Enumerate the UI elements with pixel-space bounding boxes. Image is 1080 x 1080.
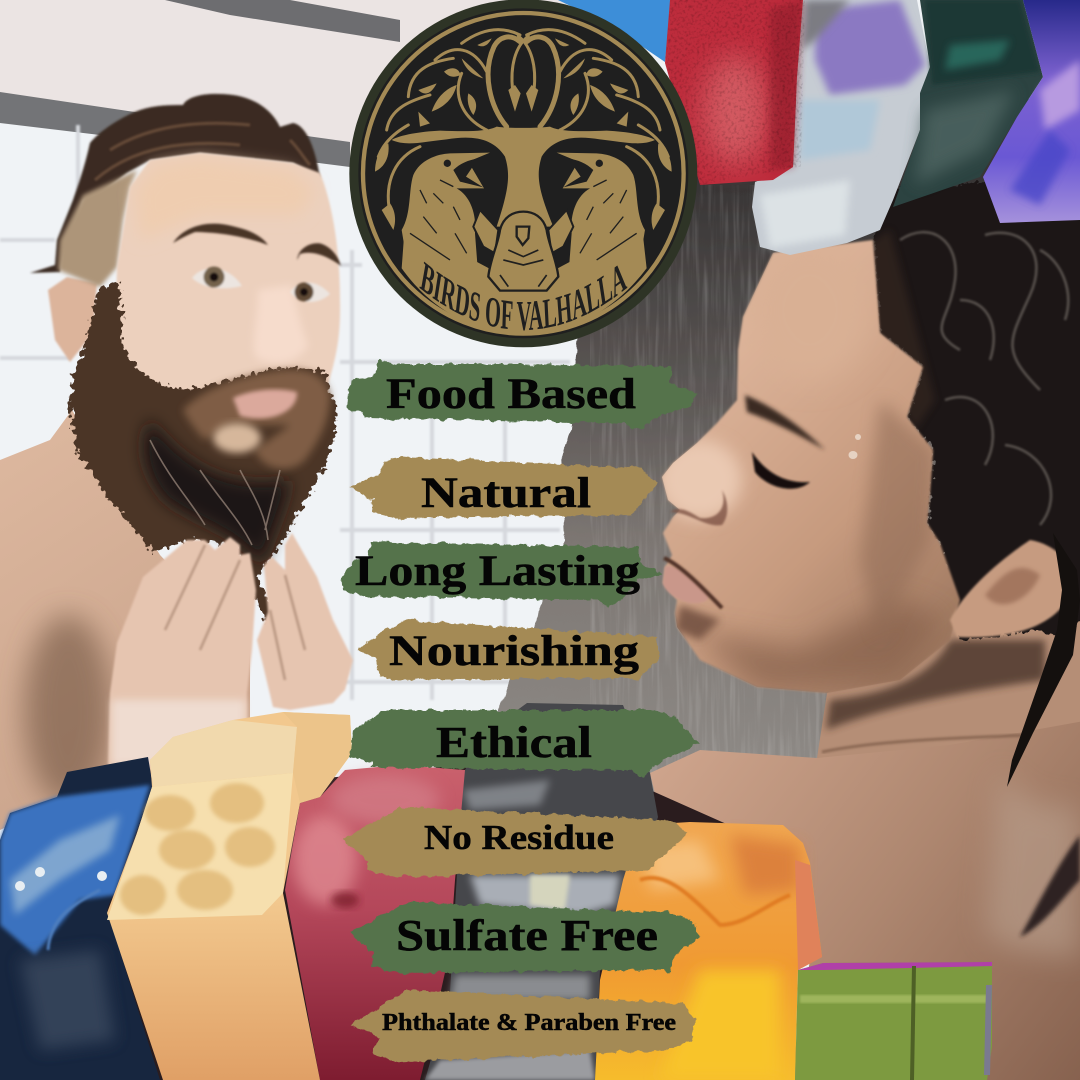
woman hairline wisps — [860, 230, 935, 430]
woman neck shadow — [826, 640, 1045, 730]
badge: Phthalate and Paraben Free — [350, 990, 695, 1062]
soap: blue — [558, 0, 672, 62]
logo branches — [378, 30, 668, 213]
woman inner ear — [985, 568, 1040, 604]
badge: Natural: Natural — [421, 470, 591, 517]
soap: dark green — [893, 0, 1043, 207]
soap: grey charcoal — [425, 703, 658, 1080]
man moustache — [183, 370, 330, 469]
logo wordmark: BIRDS OF VALHALLA — [420, 262, 628, 330]
man left eye — [192, 266, 242, 288]
soap: honeycomb — [107, 712, 352, 1080]
man ear — [48, 277, 97, 362]
badge: Sulfate Free: Sulfate Free — [396, 911, 658, 960]
logo right raven — [548, 153, 645, 277]
man right brow — [297, 243, 341, 266]
man left brow — [173, 224, 268, 245]
logo bottom banner — [402, 223, 647, 334]
woman back and shoulder — [650, 690, 1080, 1080]
logo outer rim — [349, 0, 697, 347]
badge: Sulfate Free — [350, 902, 700, 973]
woman eyebrow — [745, 395, 825, 450]
badge: Food Based: Food Based — [386, 371, 636, 418]
badge: No Residue: No Residue — [424, 818, 614, 857]
man chin patch — [213, 423, 261, 453]
logo left raven — [402, 153, 498, 277]
soap: galaxy blue — [0, 757, 160, 1080]
man left hand — [108, 537, 256, 770]
woman ear — [950, 540, 1073, 637]
woman lip line — [664, 558, 722, 608]
woman nose shadow — [670, 490, 727, 525]
soap: red — [665, 0, 805, 185]
man beard dark core — [144, 420, 290, 565]
logo: Birds of Valhalla badge — [349, 0, 698, 348]
man right eye — [290, 282, 330, 302]
badge: Ethical: Ethical — [436, 718, 592, 767]
soap: purple — [983, 0, 1080, 223]
badge: Nourishing — [358, 620, 658, 680]
soap bars: bottom — [0, 703, 992, 1080]
photo: woman showering — [650, 170, 1080, 1080]
man finger lines — [165, 545, 305, 680]
logo centre bird — [488, 212, 558, 291]
soap bars: top right — [558, 0, 1080, 255]
woman neck — [817, 620, 1080, 758]
man beard strands — [150, 440, 280, 545]
man nose and cheek — [254, 285, 308, 363]
badge: Long Lasting: Long Lasting — [355, 548, 641, 595]
woman eye closed — [752, 452, 810, 489]
badge: No Residue — [343, 807, 688, 877]
woman face — [662, 240, 960, 693]
man right hand — [257, 533, 353, 710]
badge: Phthalate and Paraben Free: Phthalate & Paraben Free — [382, 1010, 676, 1036]
man hair — [30, 94, 320, 273]
badge: Long Lasting — [342, 542, 662, 607]
logo tree — [392, 85, 655, 227]
logo leaves — [375, 38, 672, 230]
woman water drops — [848, 434, 861, 459]
soap stars — [15, 867, 107, 891]
man hand light — [112, 700, 245, 765]
woman back strand — [1020, 835, 1080, 937]
badge: Food Based — [347, 360, 697, 430]
badge: Natural — [350, 457, 658, 518]
man face — [115, 153, 340, 420]
background: grey shower with torn edge — [498, 100, 1080, 830]
soap: green — [795, 962, 992, 1080]
soap: white marbled — [752, 0, 930, 255]
woman back highlights — [985, 770, 1080, 960]
man beard — [70, 280, 336, 637]
man neck and torso — [0, 410, 250, 830]
badge: Nourishing: Nourishing — [389, 628, 640, 675]
man mouth — [233, 390, 297, 419]
woman face shading — [658, 240, 945, 690]
woman wet strand — [1007, 533, 1080, 787]
woman neck fold — [822, 735, 1030, 752]
photo: bearded man — [0, 94, 353, 830]
woman hair — [873, 170, 1080, 640]
woman hair shine — [900, 232, 1068, 525]
honeycomb cells — [120, 783, 275, 915]
badge: Ethical — [350, 710, 700, 778]
man shaved side — [58, 170, 137, 287]
soap: raspberry red — [285, 765, 465, 1080]
woman lips — [663, 566, 709, 603]
man hair highlights — [95, 123, 310, 180]
soap: orange swirl — [595, 822, 822, 1080]
man forehead tone — [135, 158, 315, 240]
soap backing shadow — [100, 765, 785, 1080]
man chest hair — [24, 615, 112, 805]
